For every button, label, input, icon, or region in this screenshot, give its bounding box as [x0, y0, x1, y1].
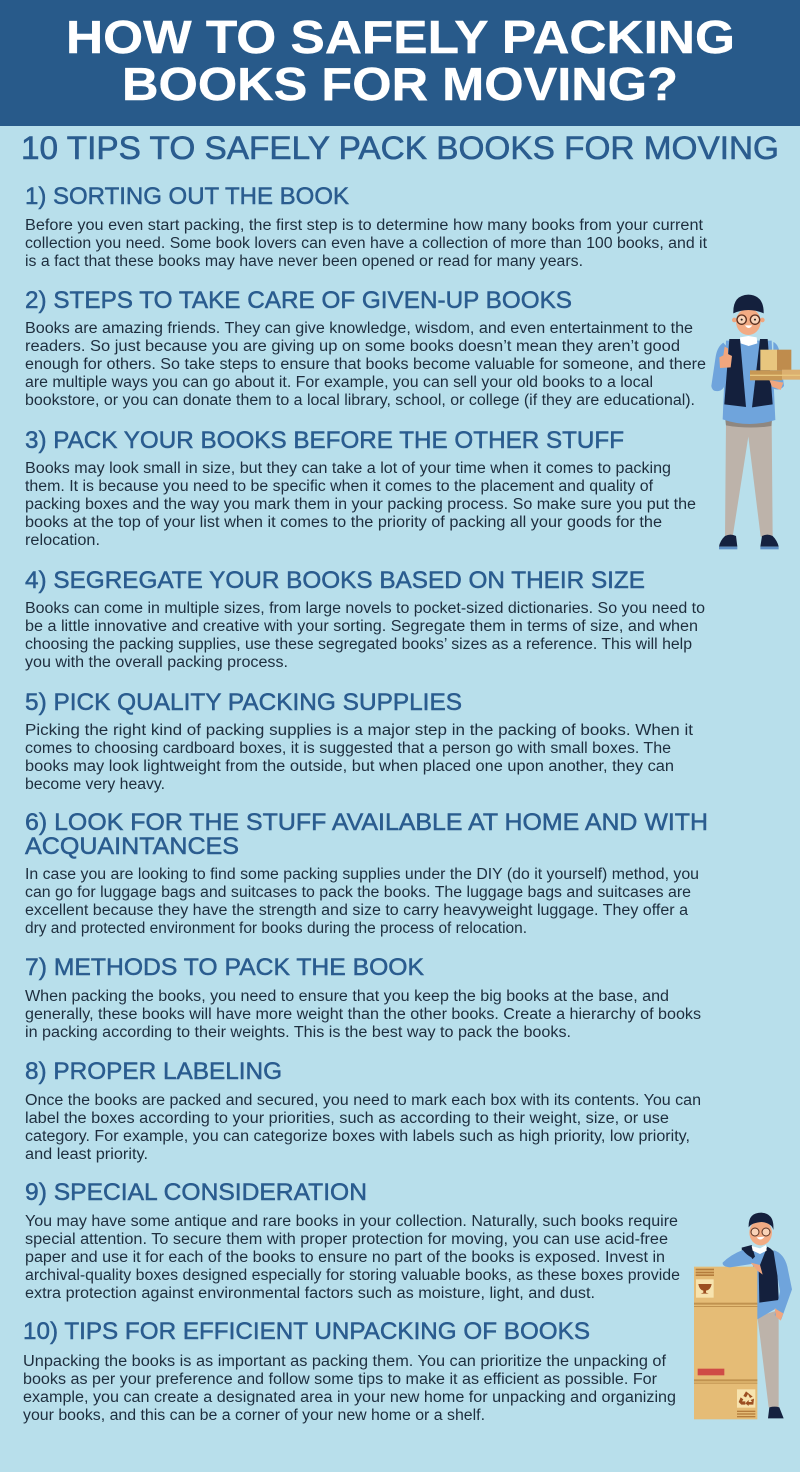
text: tip 3: packing boxes and the way you mark them in your packing process. So make sure you put the	[25, 496, 696, 513]
heading: tip 6	[25, 809, 708, 860]
text: tip 4: choosing the packing supplies, use these segregated books’ sizes as a reference. This will help	[25, 636, 692, 653]
text: tip 3: relocation.	[25, 532, 100, 549]
heading: tip 6: ACQUAINTANCES	[25, 833, 239, 860]
text: tip 9: special attention. To secure them with proper protection for moving, you can use acid-free	[25, 1231, 668, 1248]
text: tip 10: Unpacking the books is as important as packing them. You can prioritize the unpacking of	[23, 1353, 667, 1370]
tip 2	[25, 287, 706, 409]
text: tip 8: label the boxes according to your priorities, such as according to their weight, size, or use	[25, 1110, 669, 1127]
text: tip 6: dry and protected environment for books during the process of relocation.	[25, 920, 527, 937]
text: tip 9: archival-quality boxes designed especially for storing valuable books, as these boxes provide	[25, 1267, 680, 1284]
text: tip 5: become very heavy.	[25, 776, 165, 793]
text: tip 9: extra protection against environmental factors such as moisture, light, and dust.	[25, 1285, 595, 1302]
heading: tip 8: 8) PROPER LABELING	[25, 1058, 282, 1085]
text: tip 3: books at the top of your list when it comes to the priority of packing all your goods for the	[25, 514, 662, 531]
text: tip 7: When packing the books, you need to ensure that you keep the big books at the base, and	[25, 988, 669, 1005]
text: tip 5: Picking the right kind of packing supplies is a major step in the packing of books. When it	[25, 722, 694, 739]
text: tip 10	[23, 1353, 676, 1424]
text: tip 5	[25, 722, 694, 793]
tip 7	[25, 954, 701, 1041]
text: tip 3: Books may look small in size, but they can take a lot of your time when it comes to packing	[25, 460, 671, 477]
text: tip 2	[25, 320, 706, 409]
text: tip 8: category. For example, you can categorize boxes with labels such as high priority, low priority,	[25, 1128, 690, 1145]
text: tip 5: comes to choosing cardboard boxes, it is suggested that a person go with small boxes. The	[25, 740, 671, 757]
text: tip 8	[25, 1092, 701, 1163]
text: tip 4: be a little innovative and creative with your sorting. Segregate them in terms of size, and when	[25, 618, 698, 635]
heading: tip 4: 4) SEGREGATE YOUR BOOKS BASED ON THEIR SIZE	[25, 567, 645, 594]
text: tip 3: them. It is because you need to be specific when it comes to the placement and quality of	[25, 478, 654, 495]
title banner: BOOKS FOR MOVING?	[122, 58, 678, 110]
text: tip 8: Once the books are packed and secured, you need to mark each box with its contents. You can	[25, 1092, 701, 1109]
text: tip 1	[25, 217, 708, 270]
text: tip 7	[25, 988, 701, 1041]
text: tip 9	[25, 1213, 680, 1302]
title banner: HOW TO SAFELY PACKING	[66, 11, 735, 63]
tip 10	[23, 1318, 676, 1424]
text: tip 2: Books are amazing friends. They can give knowledge, wisdom, and even entertainment to the	[25, 320, 693, 337]
tip 3	[25, 427, 696, 549]
tip 4	[25, 567, 705, 671]
text: tip 7: in packing according to their weights. This is the best way to pack the books.	[25, 1024, 571, 1041]
text: tip 2: bookstore, or you can donate them to a local library, school, or college (if they are educational).	[25, 392, 695, 409]
subtitle: 10 TIPS TO SAFELY PACK BOOKS FOR MOVING	[21, 130, 779, 166]
tip 1	[25, 183, 708, 270]
text: tip 6: can go for luggage bags and suitcases to pack the books. The luggage bags and suitcases are	[25, 884, 691, 901]
text: tip 6: excellent because they have the strength and size to carry heavyweight luggage. They offer a	[25, 902, 688, 919]
text: tip 4	[25, 600, 705, 671]
text: tip 6: In case you are looking to find some packing supplies under the DIY (do it yourself) method, you	[25, 866, 699, 883]
text: tip 2: readers. So just because you are giving up on some books doesn’t mean they aren’t good	[25, 338, 680, 355]
heading: tip 2: 2) STEPS TO TAKE CARE OF GIVEN-UP BOOKS	[25, 287, 572, 314]
tip 5	[25, 689, 694, 793]
text: tip 10: books as per your preference and follow some tips to make it as efficient as possible. For	[23, 1371, 657, 1388]
text: tip 7: generally, these books will have more weight than the other books. Create a hierarchy of books	[25, 1006, 701, 1023]
heading: tip 1: 1) SORTING OUT THE BOOK	[25, 183, 350, 210]
tip 9	[25, 1179, 680, 1302]
text: tip 1: collection you need. Some book lovers can even have a collection of more than 100 books, and it	[25, 235, 708, 252]
tip 8	[25, 1058, 701, 1163]
icon: mover holding books	[711, 295, 800, 549]
title banner	[0, 0, 800, 126]
text: tip 2: enough for others. So take steps to ensure that books become valuable for someone, and there	[25, 356, 706, 373]
text: tip 1: Before you even start packing, the first step is to determine how many books from your current	[25, 217, 704, 234]
text: tip 2: are multiple ways you can go about it. For example, you can sell your old books to a local	[25, 374, 653, 391]
text: tip 9: You may have some antique and rare books in your collection. Naturally, such books require	[25, 1213, 678, 1230]
icon: mover leaning on box	[694, 1213, 792, 1419]
text: tip 9: paper and use it for each of the books to ensure no part of the books is exposed. Invest in	[25, 1249, 665, 1266]
heading: tip 5: 5) PICK QUALITY PACKING SUPPLIES	[25, 689, 462, 716]
text: tip 6	[25, 866, 699, 937]
heading: tip 9: 9) SPECIAL CONSIDERATION	[25, 1179, 367, 1206]
text: tip 4: Books can come in multiple sizes, from large novels to pocket-sized dictionaries. So you need to	[25, 600, 705, 617]
heading: tip 6: 6) LOOK FOR THE STUFF AVAILABLE AT HOME AND WITH	[25, 809, 708, 836]
text: tip 4: you with the overall packing process.	[25, 654, 288, 671]
text: tip 1: is a fact that these books may have never been opened or read for many years.	[25, 253, 583, 270]
text: tip 8: and least priority.	[25, 1146, 148, 1163]
text: tip 10: example, you can create a designated area in your new home for unpacking and organizing	[23, 1389, 676, 1406]
heading: tip 7: 7) METHODS TO PACK THE BOOK	[25, 954, 425, 981]
text: tip 5: books may look lightweight from the outside, but when placed one upon another, they can	[25, 758, 674, 775]
heading: tip 3: 3) PACK YOUR BOOKS BEFORE THE OTHER STUFF	[25, 427, 624, 454]
text: tip 10: your books, and this can be a corner of your new home or a shelf.	[23, 1407, 485, 1424]
heading: tip 10: 10) TIPS FOR EFFICIENT UNPACKING OF BOOKS	[23, 1318, 590, 1345]
tip 6	[25, 809, 708, 937]
text: tip 3	[25, 460, 696, 549]
